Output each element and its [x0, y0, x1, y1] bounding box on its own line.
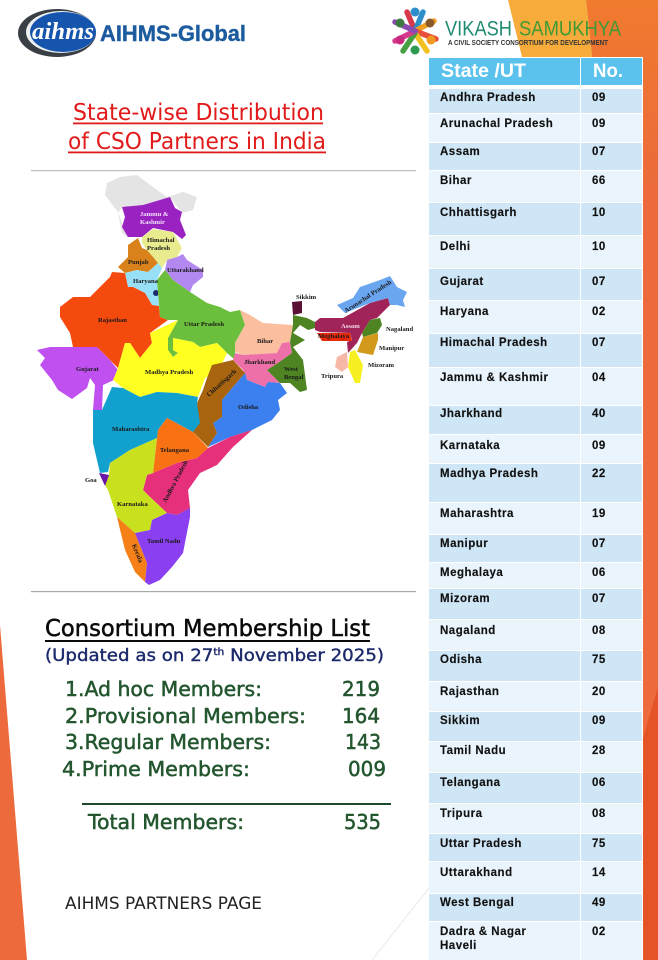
- map labels: Madhya Pradesh: [145, 369, 194, 376]
- state: Chhattisgarh: [193, 360, 245, 447]
- state: Haryana: [125, 263, 162, 306]
- state: Gujarat: [37, 347, 118, 410]
- row: Bihar: 66: [592, 175, 606, 187]
- row: Meghalaya: 06: [592, 567, 606, 579]
- row: Tripura: 08: [592, 808, 606, 820]
- row: Odisha: 75: [592, 654, 606, 666]
- row: Mizoram: 07: [592, 593, 606, 605]
- row: Manipur: [429, 535, 642, 562]
- row: Maharashtra: Maharashtra: [440, 508, 514, 520]
- row: Nagaland: Nagaland: [440, 625, 496, 637]
- row: Jharkhand: Jharkhand: [440, 408, 503, 420]
- row: Telangana: Telangana: [440, 777, 501, 789]
- row: Tamil Nadu: Tamil Nadu: [440, 745, 506, 757]
- map labels: Uttarakhand: [167, 267, 204, 274]
- row: Madhya Pradesh: [429, 464, 642, 502]
- row: Andhra Pradesh: Andhra Pradesh: [440, 92, 536, 104]
- row: Maharashtra: 19: [592, 508, 606, 520]
- state: Tripura: [335, 352, 348, 372]
- row: Arunachal Pradesh: [429, 114, 642, 142]
- decorative faint diagonal: [372, 888, 429, 960]
- row: Dadra & Nagar Haveli: 02: [592, 926, 606, 938]
- logo: Vikash Samukhya: [395, 8, 621, 54]
- state: Telangana: [153, 418, 208, 473]
- state: Uttar Pradesh: [157, 270, 245, 360]
- total members: 535: [344, 810, 381, 834]
- logo: Vikash Samukhya: A CIVIL SOCIETY CONSORTIUM FOR DEVELOPMENT: [448, 40, 609, 47]
- map labels: Uttar Pradesh: [184, 321, 224, 328]
- total members: Total Members:: [87, 810, 244, 834]
- row: West Bengal: 49: [592, 897, 606, 909]
- membership list: [62, 677, 386, 781]
- row: Sikkim: 09: [592, 715, 606, 727]
- row: Nagaland: [429, 620, 642, 650]
- map labels: Kerala: [130, 543, 144, 564]
- state: Delhi: [153, 290, 159, 296]
- state: Sikkim: [292, 301, 302, 315]
- row: Arunachal Pradesh: 09: [592, 118, 606, 130]
- row: Bihar: [429, 171, 642, 202]
- member row 1: 1.Ad hoc Members:: [65, 677, 262, 701]
- row: Gujarat: Gujarat: [440, 276, 484, 288]
- row: Dadra & Nagar Haveli: Dadra & Nagar: [440, 926, 526, 938]
- member row 2: 2.Provisional Members:: [65, 704, 306, 728]
- map labels: Nagaland: [386, 326, 413, 333]
- map labels: Sikkim: [296, 294, 317, 301]
- row: Chhattisgarh: Chhattisgarh: [440, 207, 517, 219]
- row: Jammu & Kashmir: Jammu & Kashmir: [440, 372, 549, 384]
- total rule: [82, 803, 391, 805]
- row: Manipur: 07: [592, 538, 606, 550]
- member row 3: 3.Regular Members:: [65, 730, 271, 754]
- divider: [31, 591, 416, 592]
- row: Karnataka: Karnataka: [440, 440, 500, 452]
- logo: AIHMS-Global: AIHMS-Global: [100, 21, 246, 46]
- row: Delhi: Delhi: [440, 241, 471, 253]
- logo: Vikash Samukhya: SAMUKHYA: [519, 18, 621, 40]
- row: Telangana: 06: [592, 777, 606, 789]
- map labels: Punjab: [128, 259, 149, 266]
- map labels: Bihar: [257, 338, 273, 345]
- map labels: Odisha: [238, 404, 259, 411]
- state: Maharashtra: [93, 387, 200, 473]
- state: Mizoram: [348, 350, 363, 383]
- row: Telangana: [429, 773, 642, 803]
- title: of CSO Partners in India: [68, 129, 326, 155]
- row: Bihar: Bihar: [440, 175, 472, 187]
- map labels: Manipur: [379, 345, 404, 352]
- state: Goa: [99, 473, 109, 486]
- map labels: Assam: [341, 323, 360, 330]
- title: State-wise Distribution: [73, 100, 324, 126]
- map labels: Arunachal Pradesh: [343, 279, 393, 315]
- state: Arunachal Pradesh: [337, 276, 407, 313]
- map labels: Jharkhand: [244, 359, 275, 366]
- row: Delhi: 10: [592, 241, 606, 253]
- map labels: Telangana: [160, 447, 190, 454]
- map labels: Tripura: [321, 373, 344, 380]
- row: Uttar Pradesh: [429, 834, 642, 861]
- member row 4: [62, 757, 386, 781]
- row: Madhya Pradesh: 22: [592, 468, 606, 480]
- logo: AIHMS-Global: [18, 9, 246, 57]
- row: Assam: 07: [592, 146, 606, 158]
- state: Odisha: [208, 373, 287, 447]
- member row 3: [65, 730, 381, 754]
- region: disputed territory: [105, 175, 197, 238]
- row: Meghalaya: [429, 563, 642, 588]
- state: Jharkhand: [233, 342, 292, 387]
- row: Uttar Pradesh: Uttar Pradesh: [440, 838, 522, 850]
- row: Jammu & Kashmir: [429, 368, 642, 405]
- background: orange band right: [586, 0, 658, 960]
- subheading: updated date: th: [213, 647, 224, 658]
- subheading: updated date: (Updated as on 27: [45, 646, 202, 666]
- row: Chhattisgarh: 10: [592, 207, 606, 219]
- map labels: Himachal: [147, 237, 175, 244]
- row: Meghalaya: Meghalaya: [440, 567, 503, 579]
- row: Karnataka: 09: [592, 440, 606, 452]
- state: Kerala: [117, 517, 147, 582]
- rows: [429, 89, 642, 960]
- row: Odisha: Odisha: [440, 654, 482, 666]
- state: Bihar: [235, 310, 293, 355]
- row: Sikkim: Sikkim: [440, 715, 480, 727]
- state: West Bengal: [267, 315, 315, 392]
- map labels: Chhattisgarh: [206, 368, 238, 398]
- state: Karnataka: [105, 438, 167, 533]
- row: Himachal Pradesh: Himachal Pradesh: [440, 337, 548, 349]
- row: West Bengal: [429, 894, 642, 921]
- logo: AIHMS-Global: aihms: [32, 19, 94, 45]
- row: Gujarat: 07: [592, 276, 606, 288]
- state: Nagaland: [362, 318, 382, 337]
- row: Assam: [429, 143, 642, 170]
- title: [68, 100, 326, 155]
- row: Andhra Pradesh: 09: [592, 92, 606, 104]
- row: Andhra Pradesh: [429, 89, 642, 113]
- row: Himachal Pradesh: 07: [592, 337, 606, 349]
- state: Meghalaya: [317, 333, 352, 341]
- row: Dadra & Nagar Haveli: Haveli: [440, 940, 477, 952]
- row: Mizoram: Mizoram: [440, 593, 490, 605]
- row: Manipur: Manipur: [440, 538, 488, 550]
- map labels: Rajasthan: [98, 317, 127, 324]
- row: Dadra & Nagar Haveli: [429, 922, 642, 960]
- divider: [31, 170, 416, 171]
- map labels: Jammu &: [140, 211, 169, 218]
- map of India: [37, 175, 413, 585]
- row: Uttarakhand: 14: [592, 867, 606, 879]
- row: Karnataka: [429, 435, 642, 463]
- state: Rajasthan: [60, 272, 168, 368]
- member row 4: 009: [348, 757, 386, 781]
- row: Uttarakhand: [429, 862, 642, 893]
- row: Arunachal Pradesh: Arunachal Pradesh: [440, 118, 553, 130]
- row: Delhi: [429, 236, 642, 268]
- map labels: Tamil Nadu: [147, 538, 181, 545]
- state: Jammu & Kashmir: [122, 197, 186, 239]
- row: Mizoram: [429, 589, 642, 619]
- background: yellow band top right: [508, 0, 600, 130]
- row: Madhya Pradesh: Madhya Pradesh: [440, 468, 538, 480]
- row: Rajasthan: Rajasthan: [440, 686, 499, 698]
- footer label: AIHMS PARTNERS PAGE: [65, 894, 262, 914]
- map labels: Kashmir: [140, 219, 165, 226]
- background: dark orange right corner: [643, 687, 658, 960]
- row: Gujarat: [429, 269, 642, 300]
- logo: Vikash Samukhya: VIKASH: [445, 18, 512, 40]
- row: Maharashtra: [429, 503, 642, 534]
- state: Punjab: [118, 238, 158, 273]
- state: Manipur: [357, 333, 378, 355]
- row: Tripura: [429, 804, 642, 833]
- row: Jharkhand: 40: [592, 408, 606, 420]
- row: Tamil Nadu: [429, 742, 642, 772]
- map labels: Andhra Pradesh: [162, 459, 190, 504]
- state: Himachal Pradesh: [142, 229, 182, 268]
- row: Jharkhand: [429, 406, 642, 434]
- member row 4: 4.Prime Members:: [62, 757, 250, 781]
- map labels: Gujarat: [76, 366, 100, 373]
- row: Jammu & Kashmir: 04: [592, 372, 606, 384]
- state: Uttarakhand: [165, 254, 203, 292]
- state: Madhya Pradesh: [113, 320, 227, 397]
- map labels: Meghalaya: [318, 333, 350, 340]
- table header: No.: [593, 61, 623, 82]
- table header: State /UT: [441, 61, 526, 82]
- map labels: Bengal: [284, 374, 304, 381]
- row: Haryana: [429, 301, 642, 333]
- heading: Consortium Membership List: Consortium Membership List: [45, 616, 370, 642]
- row: Himachal Pradesh: [429, 334, 642, 367]
- member row 3: 143: [345, 730, 381, 754]
- map labels: West: [284, 366, 299, 373]
- row: Uttar Pradesh: 75: [592, 838, 606, 850]
- map labels: [76, 211, 413, 564]
- row: Rajasthan: 20: [592, 686, 606, 698]
- map labels: Maharashtra: [112, 426, 150, 433]
- state: Assam: [315, 298, 390, 353]
- member row 2: 164: [342, 704, 380, 728]
- row: Rajasthan: [429, 682, 642, 711]
- row: Sikkim: [429, 712, 642, 741]
- table header: [429, 58, 642, 85]
- row: Tripura: Tripura: [440, 808, 483, 820]
- table: state and UT counts: [429, 57, 643, 960]
- row: Haryana: Haryana: [440, 306, 489, 318]
- map labels: Mizoram: [368, 362, 395, 369]
- row: Nagaland: 08: [592, 625, 606, 637]
- total members: [87, 810, 381, 834]
- row: Haryana: 02: [592, 306, 606, 318]
- map labels: Goa: [85, 477, 97, 484]
- row: West Bengal: West Bengal: [440, 897, 514, 909]
- row: Tamil Nadu: 28: [592, 745, 606, 757]
- background: orange left wedge: [0, 625, 27, 960]
- map labels: Pradesh: [147, 245, 170, 252]
- row: Uttarakhand: Uttarakhand: [440, 867, 513, 879]
- row: Odisha: [429, 651, 642, 681]
- map labels: Karnataka: [117, 501, 148, 508]
- state: Tamil Nadu: [135, 508, 190, 585]
- map labels: Haryana: [133, 278, 159, 285]
- state: Andhra Pradesh: [143, 430, 252, 515]
- member row 1: 219: [342, 677, 380, 701]
- subheading: updated date: November 2025): [224, 646, 384, 666]
- row: Assam: Assam: [440, 146, 480, 158]
- row: Chhattisgarh: [429, 203, 642, 235]
- member row 1: [65, 677, 380, 701]
